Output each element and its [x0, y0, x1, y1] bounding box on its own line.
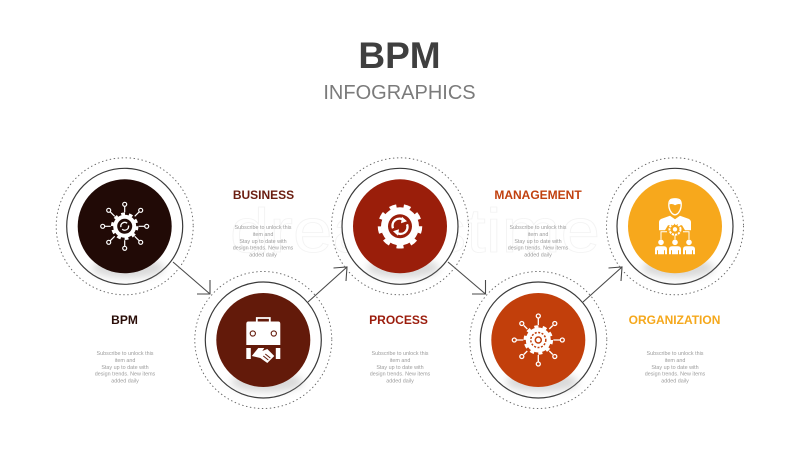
- text block: ORGANIZATION: Stay up to date with: [651, 365, 699, 371]
- step 5 circle: [606, 158, 744, 295]
- text block: ORGANIZATION: design trends. New items: [645, 372, 706, 378]
- text block: BUSINESS: Subscribe to unlock this: [235, 225, 292, 231]
- text block: BUSINESS: item and: [253, 232, 273, 238]
- text block: MANAGEMENT: Stay up to date with: [514, 239, 562, 245]
- text block: BUSINESS: design trends. New items: [233, 246, 294, 252]
- text block: ORGANIZATION: item and: [665, 358, 685, 364]
- text block: PROCESS: Subscribe to unlock this: [372, 351, 429, 357]
- panel: step 4 MANAGEMENT: [470, 188, 607, 408]
- arrow: step 3 to step 4: [448, 262, 486, 294]
- heading: MANAGEMENT: MANAGEMENT: [494, 188, 582, 202]
- text block: BPM: Subscribe to unlock this: [97, 351, 154, 357]
- title: BPM: [358, 35, 441, 76]
- text block: PROCESS: design trends. New items: [370, 372, 431, 378]
- text block: BPM: Stay up to date with: [101, 365, 149, 371]
- arrow: step 2 to step 3: [308, 267, 347, 302]
- heading: BPM: BPM: [111, 313, 138, 327]
- step 2 circle: [195, 272, 332, 408]
- watermark: dreamstime: [230, 197, 600, 266]
- icon: briefcase and handshake: [246, 318, 280, 363]
- icon: gear network: [512, 314, 564, 366]
- heading: BUSINESS: BUSINESS: [233, 188, 294, 202]
- text block: MANAGEMENT: added daily: [524, 252, 552, 258]
- step 1 circle: [56, 158, 193, 295]
- text block: BPM: added daily: [111, 378, 139, 384]
- text block: MANAGEMENT: Subscribe to unlock this: [510, 225, 567, 231]
- text block: MANAGEMENT: design trends. New items: [508, 246, 569, 252]
- text block: BUSINESS: Stay up to date with: [239, 239, 287, 245]
- arrow: step 4 to step 5: [583, 267, 622, 302]
- arrow: step 1 to step 2: [173, 262, 210, 294]
- text block: BUSINESS: added daily: [249, 252, 277, 258]
- icon: gear network: [101, 202, 149, 250]
- heading: PROCESS: PROCESS: [369, 313, 428, 327]
- heading: ORGANIZATION: ORGANIZATION: [629, 313, 720, 327]
- text block: PROCESS: added daily: [386, 378, 414, 384]
- panel: step 3 PROCESS: [332, 158, 468, 384]
- panel: step 5 ORGANIZATION: [606, 158, 744, 384]
- step 3 circle: [332, 158, 468, 295]
- text block: BPM: item and: [115, 358, 135, 364]
- subtitle: INFOGRAPHICS: [323, 82, 476, 104]
- text block: PROCESS: Stay up to date with: [376, 365, 424, 371]
- icon: gear with refresh arrows: [380, 206, 420, 247]
- text block: BPM: design trends. New items: [95, 372, 156, 378]
- step 4 circle: [470, 272, 607, 408]
- text block: PROCESS: item and: [390, 358, 410, 364]
- text block: ORGANIZATION: Subscribe to unlock this: [647, 351, 704, 357]
- panel: step 1 BPM: [56, 158, 193, 384]
- text block: ORGANIZATION: added daily: [661, 378, 689, 384]
- icon: manager with team and gear: [655, 199, 695, 254]
- text block: MANAGEMENT: item and: [528, 232, 548, 238]
- panel: step 2 BUSINESS: [195, 188, 332, 408]
